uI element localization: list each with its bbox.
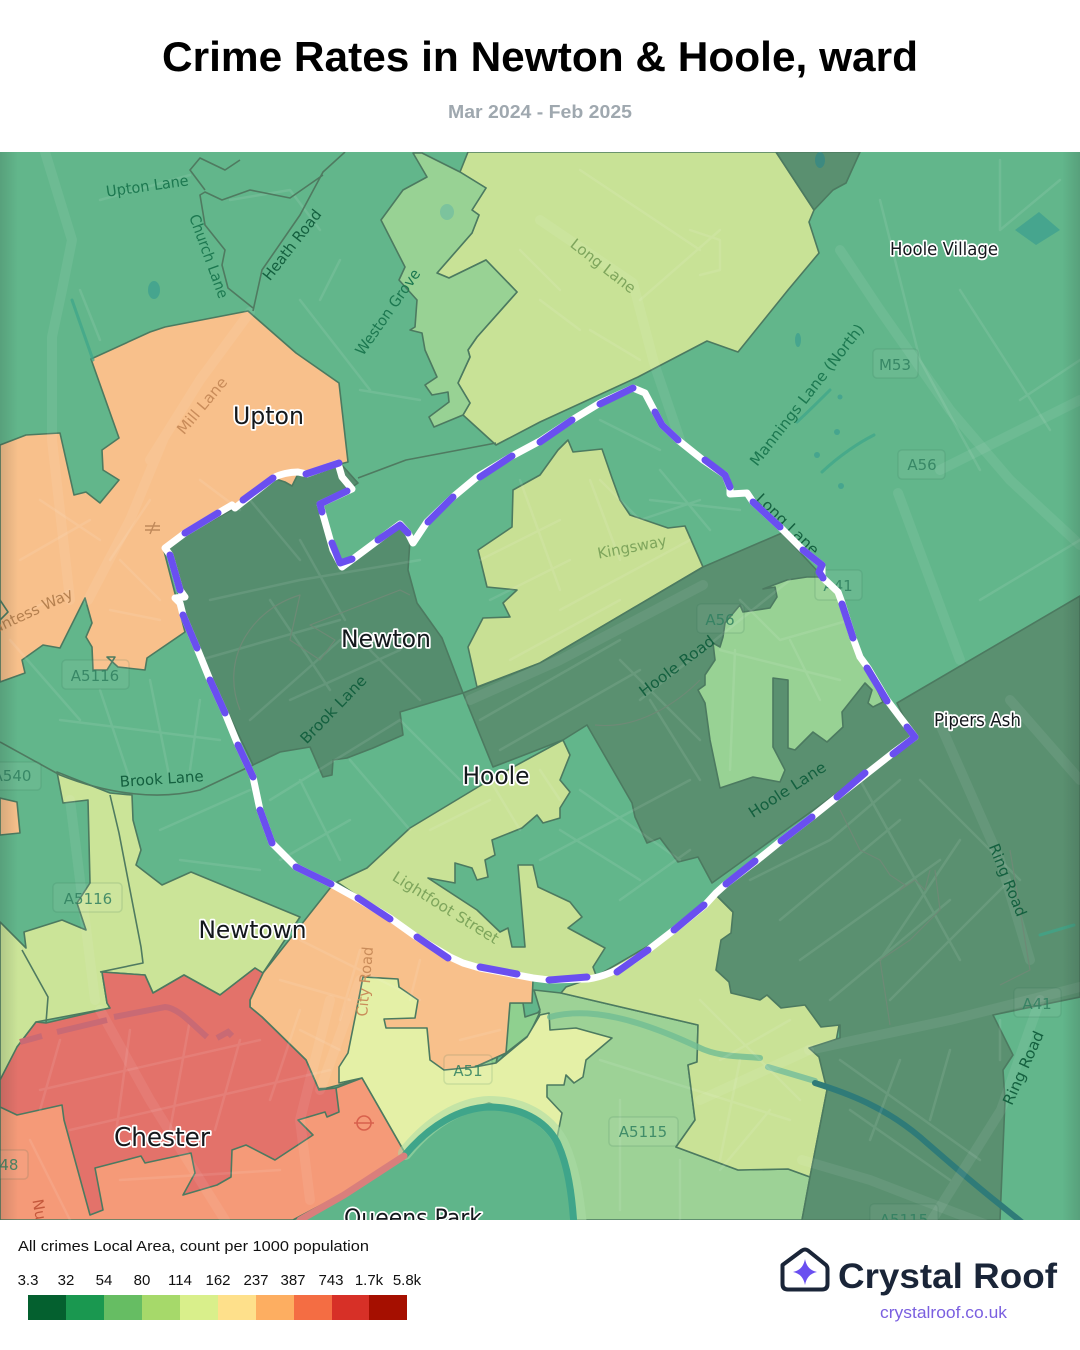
legend tick values: 162 — [205, 1272, 231, 1289]
place names: Newtown — [198, 916, 306, 944]
legend tick values: 114 — [168, 1272, 192, 1289]
badge: A41 north: A41 — [823, 577, 853, 595]
legend title: All crimes Local Area, count per 1000 population — [18, 1238, 369, 1255]
road name labels: Brook Lane — [119, 767, 204, 791]
place names: Hoole Village — [890, 239, 998, 260]
badge: A5116 south: A5116 — [64, 890, 112, 908]
badge: A56 east — [898, 450, 945, 479]
header: title and date range — [162, 33, 918, 122]
place names — [114, 239, 1021, 1232]
badge: A41 south — [1014, 988, 1061, 1017]
road name labels: Upton Lane — [105, 171, 190, 201]
road name labels: Church Lane — [185, 212, 232, 301]
badge: A56 east: A56 — [907, 456, 937, 474]
badge: A51 — [444, 1055, 492, 1084]
icon: house with star — [782, 1250, 828, 1290]
legend tick values: 54 — [96, 1272, 112, 1289]
river, canal, ponds and streams — [72, 152, 1074, 1226]
legend tick values: 237 — [243, 1272, 269, 1289]
badge: M53 — [873, 349, 918, 378]
ward boundary: Newton & Hoole — [165, 388, 915, 980]
badge: A41 north — [815, 570, 862, 600]
badge: A5116 west: A5116 — [71, 667, 119, 685]
place names: Pipers Ash — [934, 710, 1021, 731]
legend tick values: 80 — [134, 1272, 150, 1289]
icon: railway station Upton — [145, 522, 160, 534]
road name labels: Ring Road — [985, 841, 1030, 919]
legend tick values: 1.7k — [355, 1272, 384, 1289]
badge: A56 centre — [706, 605, 745, 634]
logo: Crystal Roof — [780, 1248, 1058, 1322]
badge: A5115 bottom — [871, 1204, 938, 1220]
wordmark: Crystal Roof — [838, 1257, 1057, 1296]
place names: Newton — [341, 625, 431, 653]
road name labels: Lightfoot Street — [389, 868, 502, 948]
map areas: crime-rate shaded regions — [0, 152, 1080, 1220]
road name labels: Weston Grove — [352, 266, 424, 359]
badge: A5116 south — [53, 883, 122, 912]
badge: A548 — [0, 1150, 28, 1179]
badge: A540 — [0, 762, 41, 790]
road name labels: Brook Lane — [296, 672, 370, 747]
legend colour bar — [28, 1295, 407, 1320]
edge vignette — [0, 152, 1080, 1220]
title: Crime Rates in Newton & Hoole, ward — [162, 33, 918, 80]
badge: A5116 west — [62, 660, 129, 689]
legend tick values: 3.3 — [18, 1272, 38, 1289]
road network — [10, 152, 1080, 1230]
road number badges — [0, 349, 1061, 1233]
road name labels: Long Lane — [752, 490, 823, 559]
choropleth map — [0, 152, 1080, 1220]
road name labels: City Road — [353, 946, 377, 1017]
road name labels: Mill Lane — [173, 374, 231, 438]
badge: A51: A51 — [453, 1062, 483, 1080]
badge: A41 south: A41 — [1022, 995, 1052, 1013]
place names: Chester — [114, 1123, 210, 1153]
road name labels: Hoole Road — [636, 632, 718, 700]
place names: Hoole — [462, 762, 530, 790]
date range subtitle: Mar 2024 - Feb 2025 — [448, 102, 632, 122]
badge: A56 centre: A56 — [705, 611, 735, 629]
badge: A5115 — [609, 1117, 678, 1146]
road name labels: Hoole Lane — [745, 758, 829, 822]
legend tick values: 5.8k — [393, 1272, 422, 1289]
ward and parish boundary lines — [0, 152, 1030, 1025]
road name labels: Mannings Lane (North) — [746, 320, 868, 469]
place names: Upton — [233, 402, 304, 430]
road name labels: Long Lane — [567, 235, 639, 297]
road name labels — [0, 171, 1048, 1231]
badge: A5115: A5115 — [619, 1123, 667, 1141]
legend tick values: 743 — [318, 1272, 344, 1289]
legend tick values — [18, 1272, 422, 1289]
website url: crystalroof.co.uk — [880, 1304, 1008, 1322]
road name labels: Heath Road — [259, 206, 325, 284]
badge: M53: M53 — [879, 356, 911, 374]
road name labels: Ring Road — [999, 1028, 1048, 1108]
railway stripes — [20, 1007, 232, 1042]
road name labels: Kingsway — [596, 532, 668, 563]
legend tick values: 32 — [58, 1272, 74, 1289]
legend tick values: 387 — [280, 1272, 306, 1289]
icon: Chester station — [354, 1116, 374, 1130]
legend: crime rate colour scale — [18, 1238, 422, 1320]
